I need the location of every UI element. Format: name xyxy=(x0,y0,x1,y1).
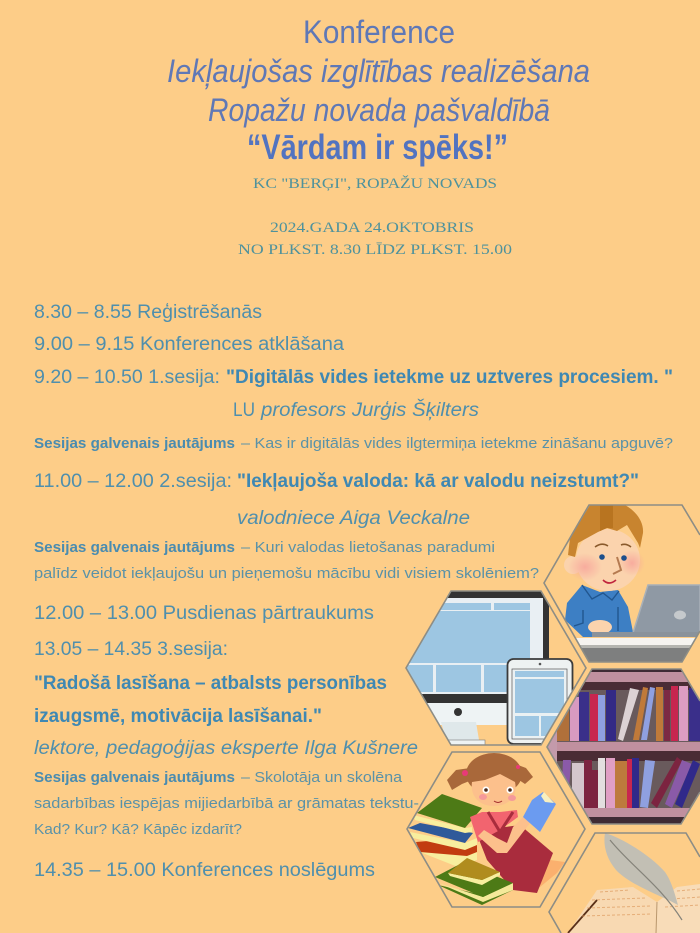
face xyxy=(576,529,640,591)
session 1 speaker: profesors Jurģis Šķilters xyxy=(260,399,480,421)
book pages xyxy=(568,887,657,933)
title: line 2: Iekļaujošas izglītības realizēšana xyxy=(167,53,590,89)
laptop xyxy=(632,585,700,636)
programme xyxy=(34,302,673,881)
shirt xyxy=(470,810,518,842)
registration: 8.30 – 8.55 Reģistrēšanās xyxy=(34,302,262,323)
session 3 title line 2: izaugsmē, motivācija lasīšanai." xyxy=(34,706,322,727)
session 2 question line 2: palīdz veidot iekļaujošu un pieņemošu mācību vidi visiem skolēniem? xyxy=(34,565,539,582)
face xyxy=(472,774,516,806)
arm xyxy=(478,817,530,853)
session 3 time: 13.05 – 14.35 3.sesija: xyxy=(34,639,228,660)
dress straps xyxy=(488,812,513,832)
venue: KC "BERĢI", ROPAŽU NOVADS xyxy=(253,175,497,192)
bottom book stack xyxy=(438,883,513,905)
session 2 speaker: valodniece Aiga Veckalne xyxy=(237,508,470,529)
title: line 3: Ropažu novada pašvaldībā xyxy=(208,92,550,128)
hexagon: quill and open book xyxy=(549,833,700,933)
session 2 time: 11.00 – 12.00 2.sesija: xyxy=(34,471,232,492)
venue and date xyxy=(238,175,512,258)
session 3 title line 1: "Radošā lasīšana – atbalsts personības xyxy=(34,673,387,694)
session 3 question line 1: – Skolotāja un skolēna xyxy=(241,769,403,786)
session 1 question: – Kas ir digitālās vides ilgtermiņa ietekme zināšanu apguvē? xyxy=(241,435,673,452)
title block xyxy=(167,14,590,167)
session 1 question label: Sesijas galvenais jautājums xyxy=(34,435,235,452)
title: Konference: Konference xyxy=(303,14,455,50)
session 3 question line 2: sadarbības iespējas mijiedarbībā ar grāmatas tekstu- xyxy=(34,795,419,812)
closing: 14.35 – 15.00 Konferences noslēgums xyxy=(34,860,375,881)
shirt xyxy=(565,585,633,637)
stand xyxy=(441,722,479,740)
session 1 speaker prefix: LU xyxy=(233,400,255,421)
hexagon: bookshelf xyxy=(547,669,700,824)
screen panels xyxy=(440,603,491,610)
handwriting xyxy=(582,889,700,916)
session 1 title: "Digitālās vides ietekme uz uztveres procesiem. " xyxy=(226,367,673,388)
book cover edge xyxy=(568,900,597,933)
hair xyxy=(568,505,643,557)
left book stack xyxy=(420,852,477,867)
top row books xyxy=(557,710,569,741)
session 2 title: "Iekļaujoša valoda: kā ar valodu neizstumt?" xyxy=(237,471,639,492)
session 2 question label: Sesijas galvenais jautājums xyxy=(34,539,235,556)
lunch: 12.00 – 13.00 Pusdienas pārtraukums xyxy=(34,603,374,624)
hair and pigtails xyxy=(447,768,468,790)
title: slogan: “Vārdam ir spēks!” xyxy=(247,128,508,167)
feather xyxy=(604,833,678,905)
shelves xyxy=(586,672,688,682)
session 3 question label: Sesijas galvenais jautājums xyxy=(34,769,235,786)
time: NO PLKST. 8.30 LĪDZ PLKST. 15.00 xyxy=(238,242,512,258)
tablet xyxy=(508,659,572,744)
open book xyxy=(523,792,556,832)
session 2 question line 1: – Kuri valodas lietošanas paradumi xyxy=(241,539,495,556)
blush xyxy=(572,556,598,578)
session 1 time: 9.20 – 10.50 1.sesija: xyxy=(34,367,220,388)
hand xyxy=(588,620,612,632)
session 3 speaker: lektore, pedagoģijas eksperte Ilga Kušnere xyxy=(34,738,418,759)
session 3 question line 3: Kad? Kur? Kā? Kāpēc izdarīt? xyxy=(34,821,242,838)
opening: 9.00 – 9.15 Konferences atklāšana xyxy=(34,334,344,355)
ear xyxy=(564,556,578,574)
hexagon: computer monitor and tablet xyxy=(406,591,586,745)
monitor chin xyxy=(428,703,507,725)
shelf frame xyxy=(588,670,684,824)
bottom row books xyxy=(562,760,571,784)
eyes, brows, nose, mouth xyxy=(599,554,605,560)
monitor body xyxy=(422,592,549,703)
date: 2024.GADA 24.OKTOBRIS xyxy=(270,220,474,236)
hexagon: girl reading xyxy=(407,752,585,907)
hexagon: boy at laptop xyxy=(544,505,700,663)
leg xyxy=(540,860,565,887)
dress xyxy=(478,825,553,893)
desk xyxy=(576,638,695,645)
